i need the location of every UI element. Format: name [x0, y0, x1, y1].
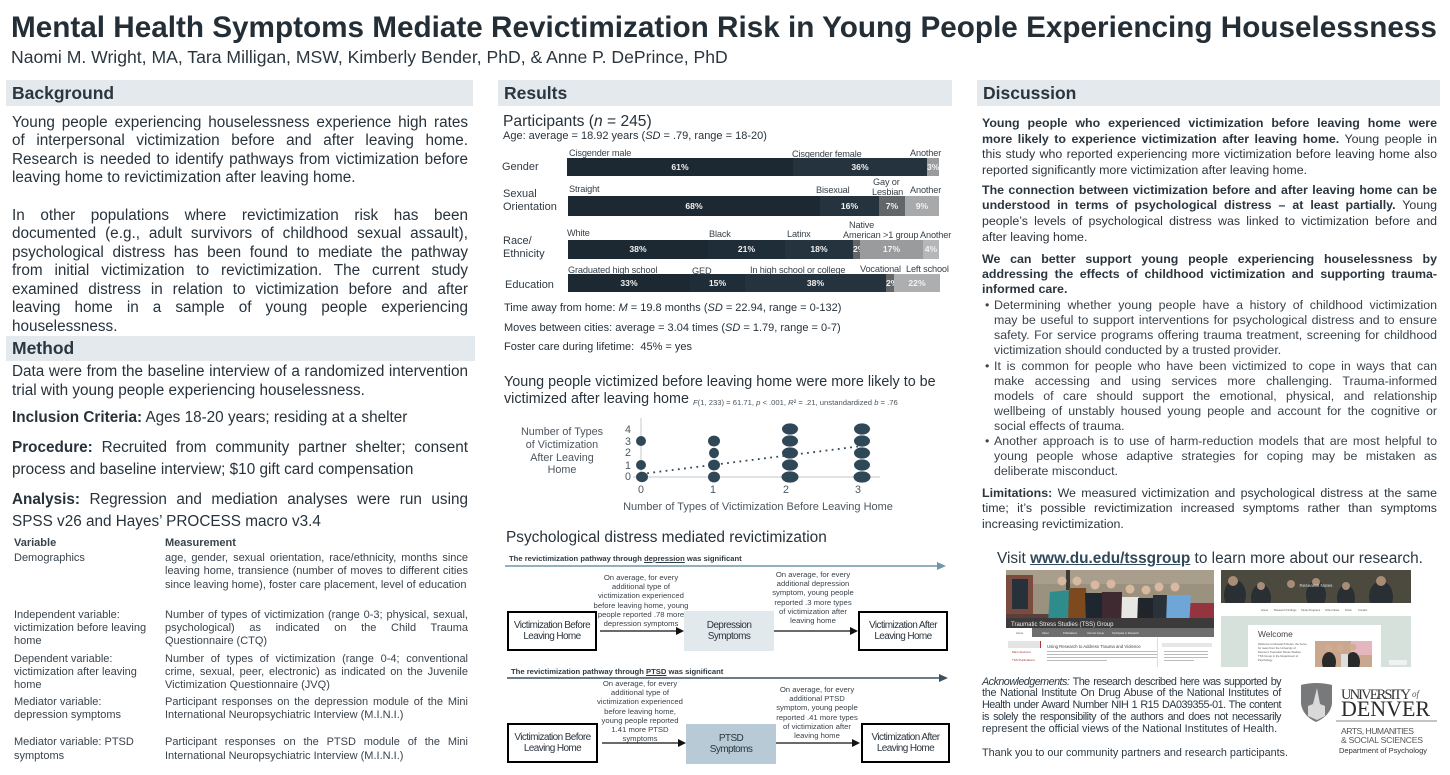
text block: finding 1: Young people who experienced victimization before leaving home were — [982, 116, 1437, 130]
logo: University of Denver: DENVER — [1341, 696, 1430, 721]
list: recommendations: • — [985, 298, 989, 312]
y ticks: 0 — [625, 471, 631, 483]
text block: background paragraph 2: houselessness. — [12, 318, 117, 335]
y ticks: 4 — [625, 424, 631, 436]
box: PTSD symptoms: PTSD — [719, 733, 743, 744]
table: variables and measurements: Measurement — [165, 537, 236, 549]
image: TSS group website screenshot: Main Sections — [1012, 650, 1031, 654]
bar labels: gender: Cisgender female — [792, 149, 862, 159]
box: victimization after leaving home: Victimization After — [869, 620, 937, 631]
row label: race and ethnicity: Ethnicity — [503, 248, 545, 260]
text: path a: young people reported — [602, 716, 678, 725]
text: path a: On average, for every — [603, 679, 677, 688]
text block: finding 1: reported significantly more victimization after leaving home. — [982, 163, 1307, 177]
image: TSS group website screenshot — [1006, 570, 1214, 667]
text: path b: of victimization after — [779, 607, 847, 616]
text: path b: reported .41 more types — [776, 713, 858, 722]
box: depression symptoms: Symptoms — [708, 631, 750, 642]
welcome heading: Welcome — [1258, 629, 1293, 639]
text: path b: symptom, young people — [776, 703, 858, 712]
text: path b: of victimization after — [783, 722, 851, 731]
text block: time, moves, foster care: Time away from home: M = 19.8 months (SD = 22.94, range = 0-132) — [504, 302, 841, 314]
image: research notes website screenshot: Welcome to Research Notes, the home — [1258, 642, 1307, 646]
bar: gender: 36% — [851, 162, 869, 172]
bar: sexual orientation: 16% — [841, 201, 858, 211]
table: variables and measurements: Demographics — [14, 552, 85, 564]
heading: background: Background — [12, 83, 114, 103]
text block: limitations: Limitations: We measured victimization and psychological distress at the same — [982, 486, 1437, 500]
text: path a: depression symptoms — [604, 619, 678, 628]
table: variables and measurements: crime, sexual, peer, electronic) as indicated on the Juvenile — [165, 666, 468, 678]
box: PTSD symptoms — [686, 724, 776, 764]
bar labels: race and ethnicity: Latinx — [787, 229, 811, 239]
banner title: Research Notes — [1300, 583, 1333, 588]
table: variables and measurements: victimization after leaving — [14, 666, 137, 678]
image: research notes website screenshot: for news from the University of — [1258, 646, 1296, 650]
bar labels: race and ethnicity: Native — [849, 220, 874, 230]
text block: method intro: trial with young people experiencing houselessness. — [12, 382, 365, 399]
box: victimization after leaving home: Leaving Home — [877, 743, 934, 754]
image: TSS group website screenshot: TSS Publications — [1012, 658, 1035, 662]
image: TSS group website screenshot: Home — [1016, 631, 1023, 635]
text block: acknowledgements: Acknowledgements: The research described here was supported by — [982, 676, 1281, 688]
text block: limitations — [982, 486, 1437, 533]
bar: gender — [567, 158, 939, 176]
navigation text — [1042, 631, 1139, 635]
navigation text: Join the Group — [1087, 631, 1105, 635]
text block: acknowledgements: is solely the responsibility of the authors and does not necessarily — [982, 711, 1281, 723]
text block: background paragraph 1: of interpersonal victimization before and after leaving home. — [12, 132, 468, 149]
text: path a: 1.41 more PTSD — [611, 725, 669, 734]
navigation text: About — [1042, 631, 1049, 635]
row label: gender: Gender — [502, 161, 539, 173]
subheading: PTSD pathway: The revictimization pathway through PTSD was significant — [511, 667, 723, 676]
navigation text: Contact — [1358, 608, 1368, 612]
image: research notes website screenshot: Psychology. — [1258, 658, 1273, 662]
x ticks: 1 — [710, 484, 716, 496]
y ticks: 1 — [625, 460, 631, 472]
icon: shield — [1301, 683, 1332, 722]
row label: race and ethnicity — [503, 235, 545, 260]
bar labels: race and ethnicity — [567, 220, 952, 240]
bar labels: gender: Another — [910, 148, 941, 158]
image: research notes website screenshot — [1221, 570, 1411, 667]
list: recommendations: wellbeing of unstably housed young people and account for the cognitive or — [994, 404, 1437, 418]
y ticks — [625, 424, 631, 483]
arrow — [602, 739, 686, 747]
bar labels: race and ethnicity: American — [843, 230, 881, 240]
row label: sexual orientation: Orientation — [503, 201, 557, 213]
table: variables and measurements: symptoms — [14, 750, 64, 762]
bar labels: race and ethnicity: White — [567, 228, 590, 238]
text block: background paragraph 2 — [12, 207, 468, 335]
row label: education: Education — [505, 279, 554, 291]
trend line — [641, 446, 862, 474]
table: variables and measurements: International Neuropsychiatric Interview (M.I.N.I.) — [165, 709, 403, 721]
navigation text: Other News — [1325, 608, 1340, 612]
text block: finding 2: after leaving home. — [982, 230, 1087, 244]
bar labels: race and ethnicity: Black — [709, 229, 731, 239]
list: recommendations: social effects of trauma. — [994, 419, 1125, 433]
chart: scatterplot of victimization before and after — [521, 418, 893, 513]
heading: discussion: Discussion — [983, 83, 1076, 103]
bar: education — [568, 274, 940, 292]
box: victimization before leaving home: Leaving Home — [524, 743, 581, 754]
table: variables and measurements: Independent variable: — [14, 609, 120, 621]
bar labels: gender: Cisgender male — [569, 148, 631, 158]
table: variables and measurements: Variable — [14, 537, 56, 549]
list: recommendations: • — [985, 434, 989, 448]
bar: education: 33% — [620, 278, 638, 288]
bar: education: 15% — [709, 278, 726, 288]
text: path a — [597, 679, 683, 743]
list: recommendations: deliberate misconduct. — [994, 464, 1118, 478]
table: variables and measurements: Questionnaire (CTQ) — [165, 635, 267, 647]
bar labels: sexual orientation: Lesbian — [872, 187, 903, 197]
bar: race and ethnicity: 18% — [810, 244, 828, 254]
bar labels: sexual orientation: Straight — [569, 184, 599, 194]
text: path a: additional type of — [611, 688, 669, 697]
table: variables and measurements: depression symptoms — [14, 709, 121, 721]
group of people — [1048, 576, 1191, 626]
heading: discussion — [977, 80, 1440, 106]
x ticks: 2 — [783, 484, 789, 496]
bar: gender: 3% — [927, 162, 939, 172]
text block: finding 1: more likely to experience victimization after leaving home. Young people in — [982, 132, 1437, 146]
text: path b: symptom, young people — [772, 588, 854, 597]
arrow — [774, 627, 858, 635]
box: victimization before leaving home: Leaving Home — [523, 631, 581, 642]
bar: sexual orientation — [568, 196, 939, 216]
list: recommendations: make accessing and using services more challenging. Trauma-informed — [994, 374, 1437, 388]
text block: limitations: increasing revictimization. — [982, 517, 1124, 531]
panel: results — [498, 80, 952, 764]
heading: scatterplot finding: victimized after leaving home — [504, 391, 689, 407]
axes — [633, 418, 880, 477]
text block: time, moves, foster care: Moves between cities: average = 3.04 times (SD = 1.79, range = 0-7) — [504, 322, 841, 334]
bar labels: sexual orientation — [569, 177, 942, 197]
heading: mediation: Psychological distress mediated revictimization — [506, 529, 827, 546]
heading: results — [498, 80, 952, 106]
list: recommendations: young people whose adaptive strategies for coping may be mistaken as — [994, 449, 1437, 463]
text: path a: before leaving home, — [604, 707, 676, 716]
x ticks: 0 — [638, 484, 644, 496]
arrow: depression pathway — [505, 562, 946, 570]
bar: race and ethnicity: 2% — [853, 244, 865, 254]
text block: background paragraph 2: leaving home in a sample of young people experiencing — [12, 299, 468, 316]
text block: procedure: Procedure: Recruited from community partner shelter; consent — [12, 439, 468, 456]
text block: background paragraph 1: Research is needed to identify pathways from victimization before — [12, 151, 468, 168]
text block: background paragraph 1 — [12, 114, 468, 186]
text block: analysis: SPSS v26 and Hayes’ PROCESS macro v3.4 — [12, 513, 321, 530]
bar: education: 22% — [908, 278, 926, 288]
x ticks: 3 — [855, 484, 861, 496]
text: path b: reported .3 more types — [774, 598, 852, 607]
navigation text: Study Programs — [1301, 608, 1321, 612]
bar labels: race and ethnicity: Another — [920, 230, 951, 240]
table: variables and measurements: age, gender, sexual orientation, race/ethnicity, months since — [165, 552, 468, 564]
text block: finding 3: addressing the effects of childhood victimization and supporting trauma- — [982, 267, 1437, 281]
y axis title: Number of Types — [521, 426, 604, 438]
logo: University of Denver: ARTS, HUMANITIES — [1341, 726, 1414, 736]
bar: race and ethnicity — [568, 240, 939, 259]
list: recommendations: models of care should support the emotional, physical, and relationship — [994, 389, 1437, 403]
table: variables and measurements: since leaving home), foster care placement, level of education — [165, 579, 466, 591]
text: path a: On average, for every — [604, 573, 678, 582]
text: path a: additional type of — [612, 582, 670, 591]
banner text: Traumatic Stress Studies (TSS) Group — [1011, 622, 1114, 628]
arrow — [600, 627, 684, 635]
text block: procedure: process and baseline interview; $10 gift card compensation — [12, 461, 413, 478]
text: path b — [772, 570, 854, 625]
box: depression symptoms: Depression — [707, 620, 751, 631]
text block: finding 1: this study who reported experiencing more victimization before leaving home also — [982, 147, 1437, 161]
box: victimization after leaving home: Leaving Home — [874, 631, 932, 642]
bar labels: education: GED — [692, 266, 711, 276]
box: victimization before leaving home: Victimization Before — [514, 620, 590, 631]
image: research notes website screenshot: TSS Group in the Department of — [1258, 654, 1298, 658]
row label: race and ethnicity: Race/ — [503, 235, 532, 247]
heading: scatterplot finding — [504, 374, 936, 407]
bar: race and ethnicity: 21% — [738, 244, 755, 254]
text block: finding 3 — [982, 252, 1437, 299]
diagram: depression pathway — [505, 554, 948, 651]
text: path a — [594, 573, 688, 628]
text block: procedure — [12, 439, 468, 478]
image: TSS group website screenshot: Using Research to Address Trauma and Violence — [1047, 644, 1141, 649]
table: variables and measurements — [14, 537, 468, 762]
arrow: PTSD pathway — [507, 674, 948, 682]
bar: sexual orientation: 7% — [886, 201, 898, 211]
text block: acknowledgements: Thank you to our community partners and research participants. — [982, 747, 1288, 759]
bar: race and ethnicity: 38% — [629, 244, 647, 254]
box: victimization before leaving home — [507, 611, 597, 651]
navigation text: Home — [1261, 608, 1269, 612]
table: variables and measurements: Number of types of victimization (range 0-4; conventional — [165, 653, 468, 665]
bar labels: education: Graduated high school — [568, 265, 657, 275]
text block: inclusion criteria: Inclusion Criteria: Ages 18-20 years; residing at a shelter — [12, 409, 407, 426]
text block: method intro — [12, 363, 468, 399]
diagram: PTSD pathway — [507, 667, 950, 764]
text: path b: leaving home — [794, 731, 840, 740]
call to action: website: Visit www.du.edu/tssgroup to learn more about our research. — [997, 550, 1423, 567]
y axis title: Home — [548, 464, 576, 476]
authors: Naomi M. Wright, MA, Tara Milligan, MSW, Kimberly Bender, PhD, & Anne P. DePrince, PhD — [11, 47, 728, 67]
data points — [636, 423, 870, 483]
text block: background paragraph 1: leaving home to revictimization after leaving home. — [12, 169, 356, 186]
logo: University of Denver — [1298, 680, 1440, 758]
text block: finding 2 — [982, 183, 1437, 246]
list: recommendations — [982, 298, 1437, 480]
text: path a: people reported .78 more — [598, 610, 684, 619]
text: path b: additional PTSD — [789, 694, 845, 703]
text: path b: leaving home — [790, 616, 836, 625]
text: path a: symptoms — [622, 734, 658, 743]
logo: University of Denver: of — [1412, 689, 1420, 699]
box: victimization after leaving home: Victimization After — [872, 732, 939, 743]
text block: finding 1 — [982, 116, 1437, 179]
row label: sexual orientation — [503, 188, 557, 213]
y ticks: 2 — [625, 447, 631, 459]
panel: discussion — [977, 80, 1440, 540]
text block: background paragraph 2: In other populations where revictimization risk has been — [12, 207, 468, 224]
text block: acknowledgements: represent the official views of the National Institutes of Health. — [982, 723, 1277, 735]
panel: background — [6, 80, 473, 335]
bar labels: sexual orientation: Another — [910, 185, 941, 195]
text: path b: additional depression — [777, 579, 849, 588]
table: variables and measurements: International Neuropsychiatric Interview (M.I.N.I.) — [165, 750, 403, 762]
text block: method intro: Data were from the baseline interview of a randomized intervention — [12, 363, 468, 380]
navigation text: Publications — [1063, 631, 1078, 635]
list: recommendations: It is common for people who have been victimized to cope in ways that can — [994, 359, 1437, 373]
text block: acknowledgements: Health under Award Number NIH 1 R15 DA039355-01. The content — [982, 699, 1281, 711]
heading: method: Method — [12, 338, 74, 358]
text block: finding 3: We can better support young people experiencing houselessness by — [982, 252, 1437, 266]
text: path b: On average, for every — [776, 570, 850, 579]
list: recommendations: victimization should conducted by a trusted provider. — [994, 343, 1281, 357]
logo: University of Denver: & SOCIAL SCIENCES — [1341, 735, 1423, 745]
text block: background paragraph 2: documented (e.g., adult survivors of childhood sexual assault), — [12, 225, 468, 242]
list: recommendations: • — [985, 359, 989, 373]
row label: sexual orientation: Sexual — [503, 188, 537, 200]
table: variables and measurements: Participant responses on the depression module of the Mini — [165, 696, 468, 708]
text block: background paragraph 2: examined distress in relation to victimization before and after — [12, 281, 468, 298]
logo: University of Denver: Department of Psychology — [1339, 746, 1427, 755]
wordmark: UNIVERSITY — [1341, 687, 1412, 703]
x axis title: Number of Types of Victimization Before Leaving Home — [623, 501, 893, 513]
table: variables and measurements: Victimization Questionnaire (JVQ) — [165, 679, 330, 691]
bar: education: 38% — [807, 278, 824, 288]
panel: method — [6, 336, 475, 762]
chart: participant demographics stacked bars — [502, 148, 952, 292]
table: variables and measurements: leaving home, transience (number of moves to different cities — [165, 565, 468, 577]
navigation text: Posts — [1345, 608, 1352, 612]
bar: sexual orientation: 9% — [916, 201, 928, 211]
text block: finding 2: understood in terms of psychological distress – at least partially. Young — [982, 198, 1437, 212]
text: path a: victimization experienced — [598, 591, 684, 600]
x ticks — [638, 484, 861, 496]
text block: analysis — [12, 491, 468, 530]
bar labels: sexual orientation: Gay or — [873, 177, 900, 187]
subheading: depression pathway: The revictimization pathway through depression was significant — [509, 554, 742, 563]
box: PTSD symptoms: Symptoms — [710, 744, 752, 755]
list: recommendations: may be useful to support interventions for psychological distress and to ensure — [994, 313, 1437, 327]
text block: finding 3: informed care. — [982, 282, 1067, 296]
box: victimization after leaving home — [861, 723, 950, 763]
text block: acknowledgements — [982, 676, 1281, 761]
heading: results: Results — [504, 83, 567, 103]
list: recommendations: safety. For service programs offering trauma treatment, screening for childhood — [994, 328, 1437, 342]
image: research notes website screenshot: Denver's Traumatic Stress Studies — [1258, 650, 1301, 654]
heading: participants: Participants (n = 245) — [503, 113, 652, 130]
box: depression symptoms — [684, 611, 774, 651]
heading: scatterplot finding: Young people victimized before leaving home were more likely to be — [504, 374, 936, 390]
bar: sexual orientation: 68% — [685, 201, 703, 211]
text: path a: victimization experienced — [597, 697, 683, 706]
heading: background — [6, 80, 473, 106]
table: variables and measurements: Mediator variable: — [14, 696, 101, 708]
navigation text — [1261, 608, 1368, 612]
list: recommendations: Another approach is to use of harm-reduction models that are most helpful to — [994, 434, 1437, 448]
bar labels: race and ethnicity: >1 group — [883, 230, 918, 240]
text block: limitations: time; it’s possible revictimization increased symptoms rather than symptoms — [982, 501, 1437, 515]
table: variables and measurements: Mediator variable: PTSD — [14, 736, 134, 748]
bar labels: education — [568, 264, 949, 276]
bar labels: education: Vocational — [860, 264, 901, 274]
table: variables and measurements: home — [14, 635, 42, 647]
text block: finding 2: The connection between victimization before and after leaving home can be — [982, 183, 1437, 197]
bar: gender: 61% — [671, 162, 689, 172]
arrow — [776, 739, 860, 747]
list: recommendations: Determining whether young people have a history of childhood victimization — [994, 298, 1437, 312]
table: variables and measurements: Number of types of victimization (range 0-3; physical, sexual, — [165, 609, 468, 621]
bar: education: 2% — [886, 278, 898, 288]
text: age: Age: average = 18.92 years (SD = .79, range = 18-20) — [503, 130, 767, 142]
y axis title: After Leaving — [530, 452, 594, 464]
y axis title: of Victimization — [526, 439, 598, 451]
bar labels: sexual orientation: Bisexual — [816, 185, 850, 195]
text block: background paragraph 2: psychological distress has been found to mediate the pathway — [12, 244, 468, 261]
navigation text: Research Findings — [1274, 608, 1297, 612]
text block: analysis: Analysis: Regression and mediation analyses were run using — [12, 491, 468, 508]
table: variables and measurements: Participant responses on the PTSD module of the Mini — [165, 736, 468, 748]
heading: method — [6, 336, 475, 361]
text: path b: On average, for every — [780, 685, 854, 694]
text: path a: before leaving home, young — [594, 601, 688, 610]
bar labels: education: Left school — [906, 264, 949, 274]
table: variables and measurements: Dependent variable: — [14, 653, 112, 665]
box: victimization before leaving home — [507, 723, 598, 763]
text block: time, moves, foster care: Foster care during lifetime: 45% = yes — [504, 341, 692, 353]
text: path b — [776, 685, 858, 740]
bar: race and ethnicity: 4% — [925, 244, 937, 254]
text block: background paragraph 1: Young people experiencing houselessness experience high rates — [12, 114, 468, 131]
box: victimization after leaving home — [858, 611, 948, 651]
y axis title — [521, 426, 604, 476]
table: variables and measurements: victimization before leaving — [14, 622, 146, 634]
bar labels: education: In high school or college — [750, 265, 845, 275]
table: variables and measurements: psychological) as indicated on the Child Trauma — [165, 622, 468, 634]
text block: background paragraph 2: from initial victimization to revictimization. The current study — [12, 262, 468, 279]
y ticks: 3 — [625, 436, 631, 448]
bar labels: gender — [569, 148, 942, 159]
text block: time, moves, foster care — [504, 302, 841, 353]
bar: race and ethnicity: 17% — [883, 244, 900, 254]
text block: acknowledgements: the National Institute On Drug Abuse of the National Institutes of — [982, 687, 1281, 699]
text block: finding 2: people’s levels of psychological distress was linked to victimization before and — [982, 214, 1437, 228]
table: variables and measurements: home — [14, 679, 42, 691]
navigation text: Participate in Research — [1112, 631, 1139, 635]
box: victimization before leaving home: Victimization Before — [514, 732, 591, 743]
title: Mental Health Symptoms Mediate Revictimization Risk in Young People Experiencing Houselessness — [11, 11, 1437, 44]
heading: scatterplot finding: F(1, 233) = 61.71, p < .001, R² = .21, unstandardized b = .76 — [693, 398, 898, 407]
